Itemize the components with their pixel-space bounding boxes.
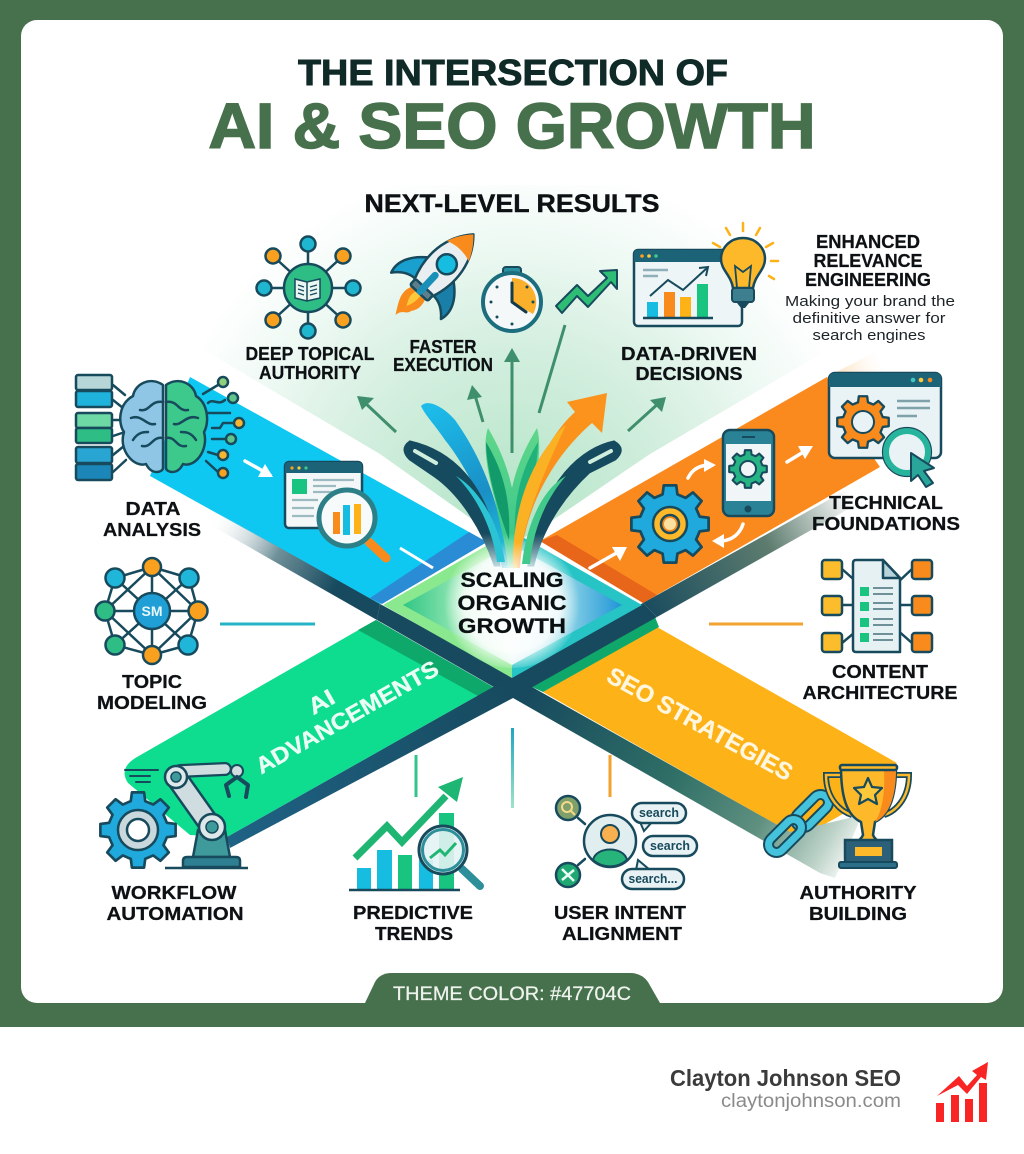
footer logo: red growth bars <box>936 1062 988 1122</box>
connector lines <box>220 624 803 808</box>
description: enhanced relevance engineering: definitive answer for <box>792 310 946 327</box>
icon: phone with gear <box>723 430 774 516</box>
icon: data analysis brain and servers <box>76 375 273 480</box>
icon: user intent <box>556 796 697 889</box>
label: enhanced relevance engineering: ENHANCED <box>816 231 920 252</box>
scaling organic growth: GROWTH <box>458 614 566 638</box>
crossing dark strips <box>227 484 868 878</box>
footer brand <box>670 1065 901 1112</box>
label: predictive trends: PREDICTIVE <box>353 902 473 923</box>
icon: user intent: search <box>639 805 679 820</box>
icon: authority chain <box>765 791 832 856</box>
icon: deep topical authority <box>256 236 360 338</box>
label: enhanced relevance engineering: RELEVANCE <box>814 250 922 271</box>
label: authority building: AUTHORITY <box>800 882 917 903</box>
title: AI & SEO GROWTH <box>208 90 816 162</box>
footer brand: Clayton Johnson SEO <box>670 1065 901 1091</box>
icon: content architecture <box>822 560 932 652</box>
icon: topic modeling network: SM <box>142 603 162 619</box>
icon: user intent: search... <box>628 871 678 886</box>
label: data analysis: ANALYSIS <box>103 519 201 540</box>
scaling organic growth: SCALING <box>460 568 564 592</box>
band: data analysis (blue) <box>150 377 487 620</box>
label: technical foundations: TECHNICAL <box>829 492 943 513</box>
label: deep topical authority: DEEP TOPICAL <box>246 343 374 364</box>
band: AI advancements (green) <box>125 620 493 837</box>
label: topic modeling: MODELING <box>97 692 207 713</box>
band: SEO strategies (yellow) <box>532 617 897 838</box>
scaling organic growth <box>458 568 566 638</box>
label: user intent alignment: ALIGNMENT <box>562 923 683 944</box>
label: content architecture: CONTENT <box>832 661 929 682</box>
splash: dark left stem <box>405 442 499 565</box>
theme color tab <box>365 973 660 1005</box>
theme color tab: THEME COLOR: #47704C <box>393 984 631 1005</box>
label: faster execution: FASTER <box>410 336 476 357</box>
label: deep topical authority: AUTHORITY <box>259 362 362 383</box>
splash: orange arrow <box>513 393 607 568</box>
growth splash <box>405 393 620 568</box>
title: THE INTERSECTION OF <box>298 52 728 93</box>
icon: predictive trends <box>349 777 480 890</box>
label: faster execution: EXECUTION <box>393 354 493 375</box>
label: authority building: BUILDING <box>809 903 907 924</box>
icon: user intent: search <box>650 838 690 853</box>
icon: technical window <box>829 373 941 487</box>
description: enhanced relevance engineering: search engines <box>812 327 926 344</box>
white flow arrows on orange band <box>590 446 813 568</box>
scaling organic growth: ORGANIC <box>458 591 566 615</box>
splash: green leaves <box>486 428 539 568</box>
icon: rocket <box>371 210 499 340</box>
label: data analysis: DATA <box>126 498 180 519</box>
icon: report with magnifier <box>285 462 386 558</box>
band label: AI advancements: AI <box>303 684 339 720</box>
splash: blue leaf <box>421 403 509 568</box>
icon: workflow automation robot and gear <box>100 765 248 868</box>
icon: stopwatch <box>483 267 541 331</box>
label: data-driven decisions: DATA-DRIVEN <box>621 343 757 364</box>
label: workflow automation: AUTOMATION <box>106 903 244 924</box>
band label: SEO strategies: SEO STRATEGIES <box>602 662 797 787</box>
icon: technical gear <box>631 485 709 563</box>
description: enhanced relevance engineering: Making your brand the <box>785 293 955 310</box>
label: workflow automation: WORKFLOW <box>112 882 237 903</box>
label: user intent alignment: USER INTENT <box>554 902 687 923</box>
label: content architecture: ARCHITECTURE <box>802 682 958 703</box>
arrows fanning out from splash <box>357 325 666 453</box>
band: technical foundations (orange) <box>540 352 885 603</box>
heading: next-level results: NEXT-LEVEL RESULTS <box>364 190 660 218</box>
label: predictive trends: TRENDS <box>375 923 453 944</box>
title <box>208 52 816 162</box>
label: technical foundations: FOUNDATIONS <box>812 513 960 534</box>
icon: topic modeling network <box>96 558 208 664</box>
results fan background <box>170 185 850 545</box>
icon: data-driven dashboard and bulb <box>634 223 778 326</box>
label: topic modeling: TOPIC <box>122 671 182 692</box>
label: enhanced relevance engineering: ENGINEERING <box>805 269 931 290</box>
center diamond <box>383 531 642 678</box>
footer brand: claytonjohnson.com <box>721 1091 901 1112</box>
icon: trophy <box>826 765 909 868</box>
icon: green growth zigzag <box>556 270 617 313</box>
label: data-driven decisions: DECISIONS <box>636 363 742 384</box>
splash: dark right stem <box>529 442 620 565</box>
band label: AI advancements: ADVANCEMENTS <box>251 655 443 779</box>
